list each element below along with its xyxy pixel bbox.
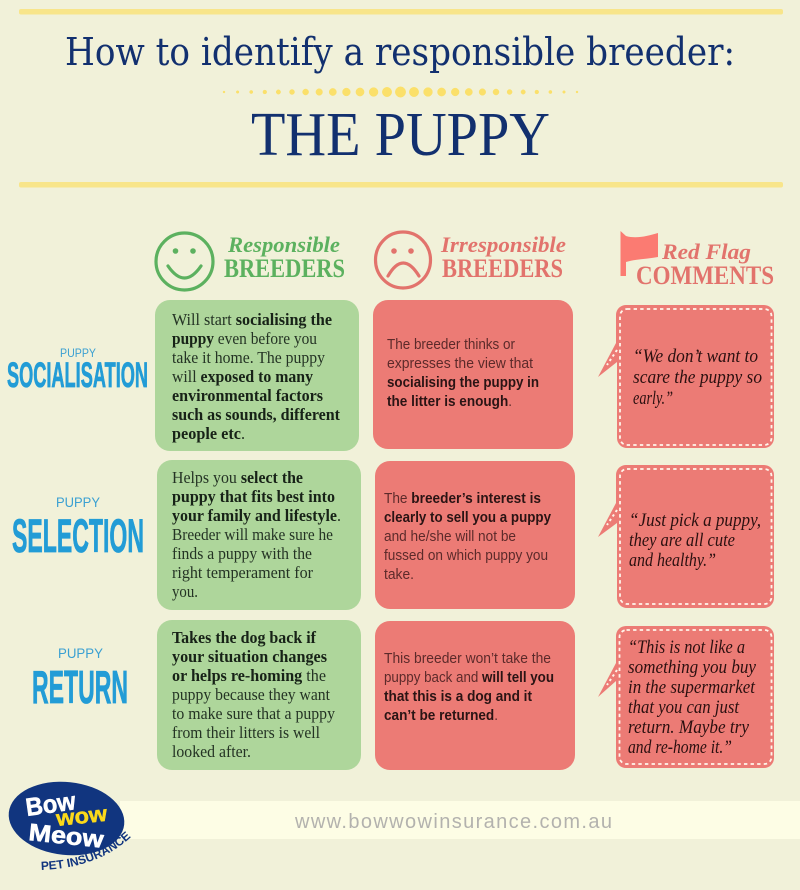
- panel: responsible selection: [157, 460, 361, 610]
- panel: comment return: “This is not like a: [628, 637, 745, 658]
- panel: comment return: that you can just: [628, 697, 740, 718]
- panel: responsible selection: your family and lifestyle.: [172, 506, 341, 525]
- panel: irresponsible return: can’t be returned.: [384, 708, 498, 724]
- panel: responsible return: or helps re-homing the: [172, 666, 326, 685]
- panel: irresponsible selection: and he/she will not be: [384, 529, 516, 545]
- panel: comment selection: and healthy.”: [629, 550, 716, 571]
- panel: responsible socialisation: will exposed to many: [172, 367, 314, 386]
- panel: irresponsible socialisation: [373, 300, 573, 449]
- column heading: red flag comments: COMMENTS: [636, 261, 774, 290]
- panel: responsible return: your situation changes: [172, 647, 328, 666]
- panel: irresponsible selection: clearly to sell you a puppy: [384, 510, 551, 526]
- panel: responsible selection: Helps you select the: [172, 468, 303, 487]
- panel: responsible socialisation: take it home. The puppy: [172, 348, 326, 367]
- icon: sad face: [376, 232, 430, 288]
- panel: comment socialisation: scare the puppy so: [633, 367, 762, 388]
- row label: puppy socialisation: [7, 348, 148, 395]
- logo: Bow Wow Meow Pet Insurance: PET INSURANCE: [42, 831, 131, 870]
- panel: comment return: return. Maybe try: [628, 717, 749, 738]
- panel: responsible socialisation: puppy even before you: [172, 329, 317, 348]
- column heading: red flag comments: Red Flag: [661, 239, 751, 264]
- panel: irresponsible selection: The breeder’s interest is: [384, 491, 541, 507]
- panel: responsible return: to make sure that a puppy: [172, 704, 336, 723]
- footer band with website: www.bowwowinsurance.com.au: [294, 811, 612, 833]
- panel: responsible socialisation: people etc.: [172, 424, 245, 443]
- panel: comment socialisation: early.”: [633, 388, 673, 409]
- panel: irresponsible socialisation: socialising the puppy in: [387, 375, 539, 391]
- panel: irresponsible return: This breeder won’t take the: [384, 651, 551, 667]
- panel: responsible socialisation: Will start socialising the: [172, 310, 332, 329]
- panel: comment return: and re-home it.”: [628, 737, 732, 758]
- panel: responsible return: puppy because they want: [172, 685, 330, 704]
- row label: puppy selection: [12, 494, 144, 562]
- panel: comment selection: [598, 465, 774, 608]
- text: SELECTION: [12, 509, 144, 562]
- panel: irresponsible selection: fussed on which puppy you: [384, 548, 548, 564]
- panel: irresponsible return: puppy back and will tell you: [384, 670, 554, 686]
- icon: red flag: [620, 231, 658, 276]
- logo: Bow Wow Meow Pet Insurance: Bow: [24, 787, 78, 822]
- panel: comment socialisation: [598, 305, 774, 448]
- panel: responsible socialisation: [155, 300, 359, 451]
- logo: Bow Wow Meow Pet Insurance: Meow: [27, 819, 105, 854]
- logo: Bow Wow Meow Pet Insurance: wow: [54, 801, 109, 831]
- panel: responsible selection: finds a puppy with the: [172, 544, 312, 563]
- title: How to identify a responsible breeder:: [65, 30, 735, 74]
- panel: comment return: something you buy: [628, 657, 756, 678]
- column heading: irresponsible breeders: BREEDERS: [442, 254, 563, 283]
- panel: irresponsible socialisation: expresses the view that: [387, 356, 533, 372]
- panel: irresponsible socialisation: the litter is enough.: [387, 394, 512, 410]
- column heading: responsible breeders: Responsible: [227, 232, 340, 257]
- icon: smiley face: [156, 233, 213, 290]
- panel: irresponsible selection: [375, 461, 575, 609]
- panel: responsible selection: puppy that fits best into: [172, 487, 335, 506]
- panel: responsible return: [157, 620, 361, 770]
- panel: comment return: [598, 626, 774, 768]
- panel: responsible return: from their litters is well: [172, 723, 320, 742]
- panel: responsible return: looked after.: [172, 742, 251, 761]
- column heading: responsible breeders: BREEDERS: [224, 254, 345, 283]
- row label: puppy selection: PUPPY: [56, 494, 101, 510]
- panel: responsible socialisation: such as sounds, different: [172, 405, 340, 424]
- row label: puppy return: PUPPY: [58, 645, 104, 661]
- panel: responsible return: Takes the dog back if: [172, 628, 316, 647]
- panel: responsible selection: right temperament for: [172, 563, 313, 582]
- column heading: irresponsible breeders: Irresponsible: [440, 232, 566, 257]
- panel: comment selection: they are all cute: [629, 530, 735, 551]
- panel: irresponsible selection: take.: [384, 567, 414, 583]
- logo: Bow Wow Meow Pet Insurance: [8, 782, 131, 870]
- row label: puppy return: [32, 645, 128, 713]
- row label: puppy return: RETURN: [32, 661, 128, 713]
- column heading: responsible breeders: [156, 232, 345, 290]
- panel: irresponsible return: [375, 621, 575, 770]
- row label: puppy socialisation: SOCIALISATION: [7, 356, 148, 395]
- panel: irresponsible return: that this is a dog and it: [384, 689, 532, 705]
- subtitle: THE PUPPY: [251, 101, 550, 169]
- panel: responsible selection: you.: [172, 582, 198, 601]
- panel: comment selection: “Just pick a puppy,: [629, 510, 761, 531]
- panel: responsible selection: Breeder will make sure he: [172, 525, 333, 544]
- column heading: red flag comments: [620, 231, 774, 290]
- panel: irresponsible socialisation: The breeder thinks or: [387, 337, 515, 353]
- panel: responsible socialisation: environmental factors: [172, 386, 324, 405]
- panel: comment return: in the supermarket: [628, 677, 756, 698]
- column heading: irresponsible breeders: [376, 232, 566, 288]
- row label: puppy socialisation: PUPPY: [60, 348, 96, 360]
- panel: comment socialisation: “We don’t want to: [633, 346, 758, 367]
- footer band with website: [120, 801, 800, 839]
